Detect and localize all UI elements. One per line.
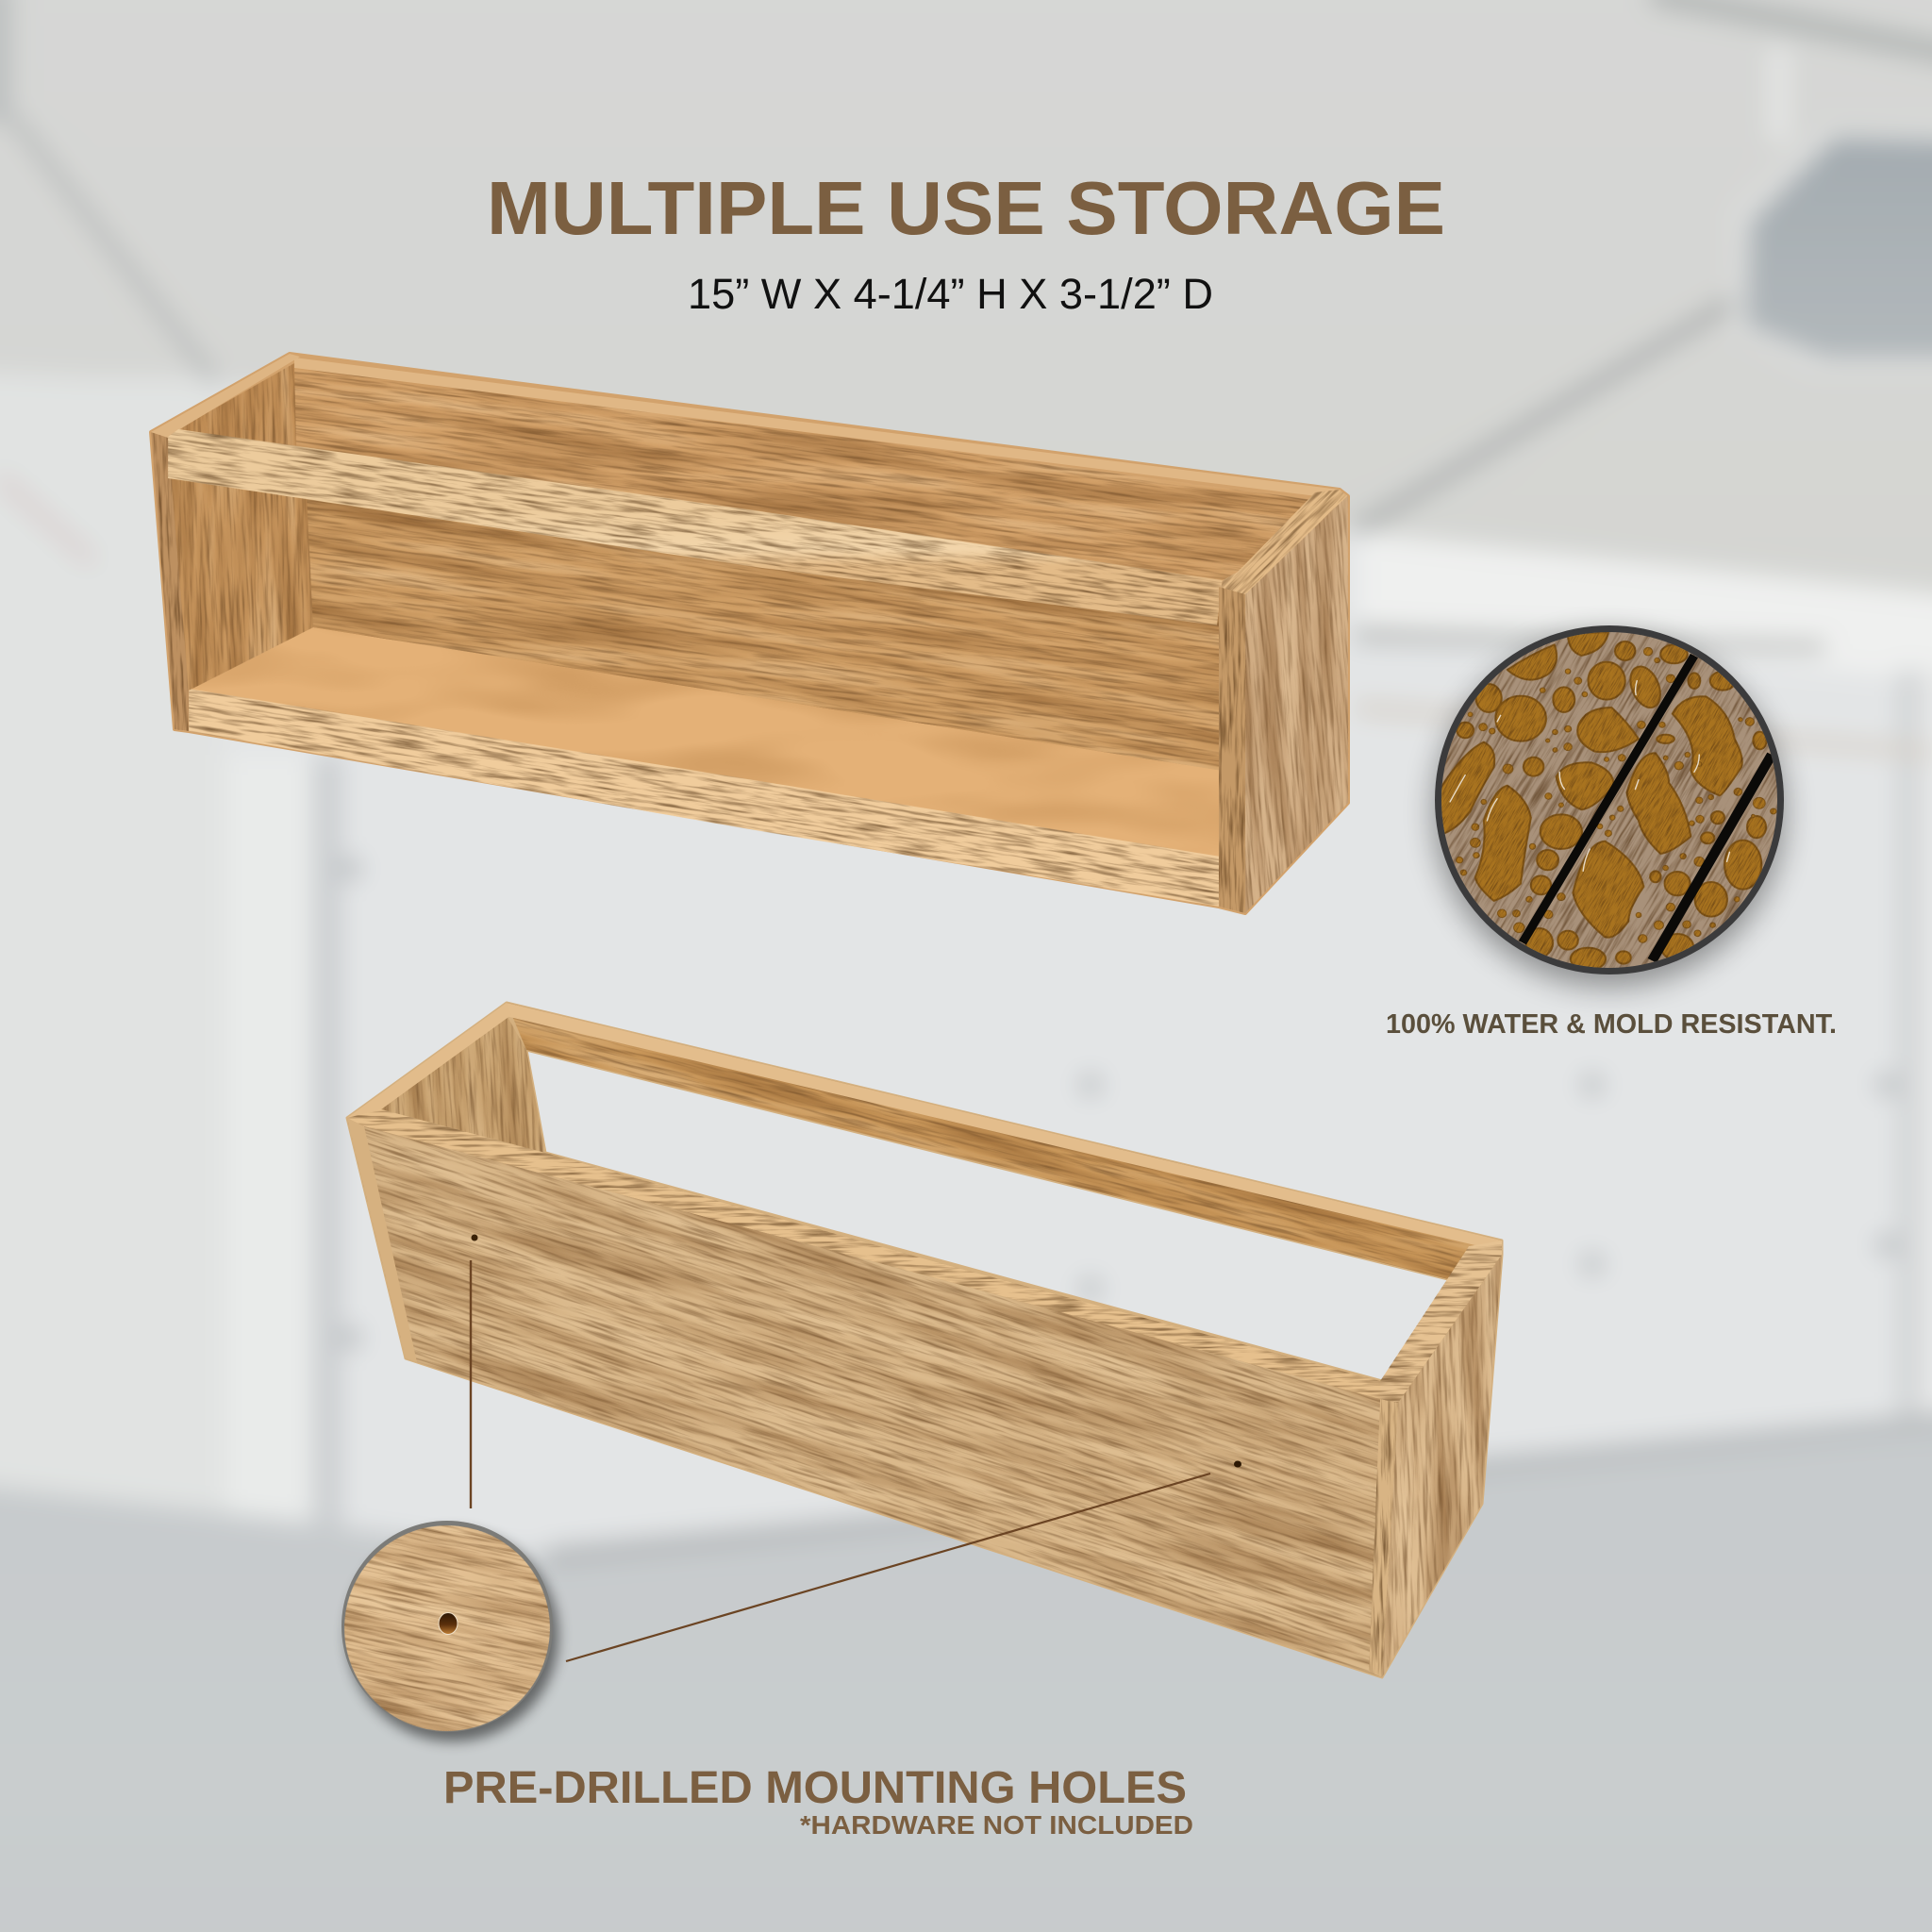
box silhouette base bbox=[151, 354, 1348, 913]
right rim bbox=[1380, 1241, 1502, 1403]
circle shadow bbox=[1434, 636, 1785, 987]
rail cast shadow bbox=[307, 500, 1217, 630]
left mounting hole bbox=[472, 1234, 477, 1241]
back wall upper bbox=[150, 219, 1343, 730]
water droplets bbox=[1441, 632, 1777, 968]
water resistance detail circle bbox=[1415, 617, 1804, 1006]
drilled hole bbox=[439, 1613, 458, 1634]
bottom box: rear view of wooden shelf bbox=[183, 769, 1567, 1932]
right side panel bbox=[1209, 487, 1384, 922]
left inner side bbox=[158, 467, 323, 736]
grey border bbox=[341, 1521, 553, 1732]
right top rim bbox=[1168, 426, 1402, 660]
hardware note: *HARDWARE NOT INCLUDED bbox=[800, 1810, 1193, 1840]
top box: front view of wooden shelf bbox=[141, 219, 1402, 1066]
shelf floor bbox=[189, 627, 1223, 860]
front rail bbox=[142, 286, 1249, 769]
box silhouette base bbox=[347, 1003, 1502, 1677]
back rail bbox=[441, 769, 1567, 1514]
top rim highlight bbox=[294, 358, 1340, 496]
mounting holes heading: PRE-DRILLED MOUNTING HOLES bbox=[443, 1763, 1187, 1813]
mounting hole detail circle bbox=[303, 1484, 591, 1773]
left inner side upper bbox=[175, 359, 299, 451]
front edge strip bbox=[1219, 587, 1245, 913]
right mounting hole bbox=[1234, 1460, 1241, 1468]
front rim bbox=[347, 1109, 1380, 1399]
dark border bbox=[1435, 625, 1784, 974]
lower lip bbox=[155, 529, 1255, 1066]
left edge strip bbox=[347, 1118, 417, 1362]
left inner panel bbox=[372, 1004, 555, 1164]
title: MULTIPLE USE STORAGE bbox=[487, 166, 1445, 250]
leader lines from holes to detail circle bbox=[471, 1260, 1210, 1661]
black deck gaps bbox=[1523, 656, 1772, 960]
water resistance caption: 100% WATER & MOLD RESISTANT. bbox=[1386, 1009, 1837, 1040]
back wall lower bbox=[263, 363, 1261, 901]
front edge strip bbox=[1369, 1399, 1398, 1677]
left corner rim bbox=[151, 354, 300, 438]
wet wood surface bbox=[1441, 632, 1777, 968]
droplet highlights bbox=[1450, 681, 1729, 871]
dimensions subtitle: 15” W X 4-1/4” H X 3-1/2” D bbox=[688, 270, 1213, 318]
left corner rim bbox=[347, 1003, 511, 1126]
left outer edge strip bbox=[141, 431, 199, 732]
back rail top highlight bbox=[507, 1003, 1502, 1246]
front panel bbox=[183, 809, 1562, 1932]
wood texture bbox=[303, 1484, 591, 1773]
circle shadow bbox=[347, 1530, 558, 1741]
right panel bbox=[1367, 1251, 1517, 1681]
